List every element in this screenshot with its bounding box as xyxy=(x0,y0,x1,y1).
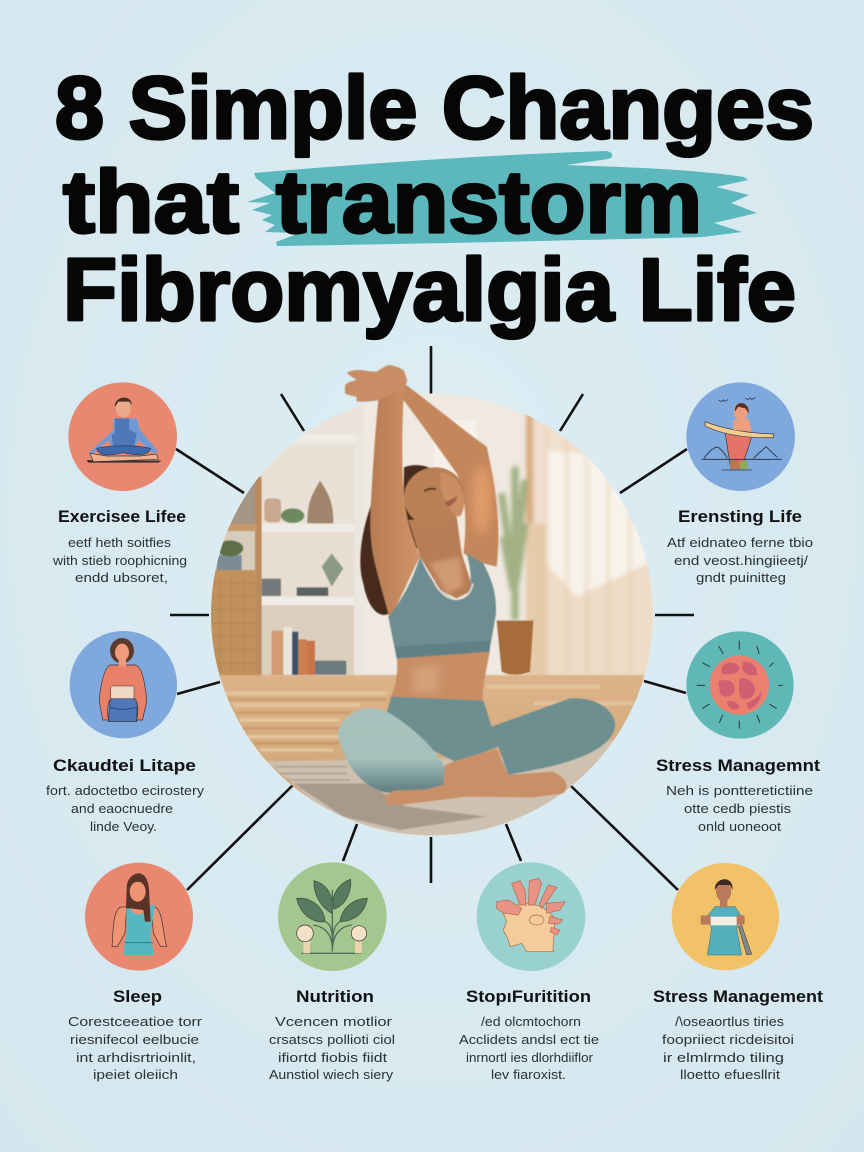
back arm xyxy=(403,383,498,567)
central photo: woman stretching in yoga pose xyxy=(200,365,670,850)
icon: person holding a sign xyxy=(672,863,779,970)
heading: Sleep xyxy=(113,987,162,1006)
heading: Exercisee Lifee xyxy=(58,507,186,526)
description: /\oseaortlus tiries xyxy=(675,1014,785,1029)
title: that xyxy=(63,152,239,251)
feet and shins xyxy=(385,749,567,805)
leggings waist and right leg xyxy=(387,697,615,775)
description xyxy=(459,1014,599,1082)
panel: Ckaudtei Litape xyxy=(46,631,205,834)
title: 8 Simple Changes xyxy=(55,58,814,157)
description: end veost.hingiieetj/ xyxy=(674,553,808,568)
icon: leaves and plant xyxy=(278,862,387,971)
description: ipeiet oleiich xyxy=(93,1067,178,1082)
left leg xyxy=(338,708,446,793)
photo room background xyxy=(211,394,653,836)
panel: Erensting Life xyxy=(667,382,813,585)
panel: Nutrition xyxy=(269,862,395,1082)
description: lloetto efuesllrit xyxy=(680,1067,780,1082)
description: endd ubsoret, xyxy=(75,570,168,585)
floor xyxy=(220,674,644,836)
sports top xyxy=(388,553,496,658)
icon: head with inflamed branches xyxy=(477,862,585,971)
description xyxy=(68,1014,203,1082)
description: Neh is pontteretictiine xyxy=(666,783,813,798)
connector lines xyxy=(170,346,694,890)
panel: StopiFuritition xyxy=(459,862,599,1082)
description: /ed olcmtochorn xyxy=(481,1014,581,1029)
midriff xyxy=(389,650,490,703)
heading: Stress Managemnt xyxy=(656,756,820,775)
heading: Nutrition xyxy=(296,987,374,1006)
description: and eaocnuedre xyxy=(71,801,173,816)
icon: balancing figure xyxy=(686,382,795,491)
woman figure xyxy=(338,365,615,805)
description xyxy=(666,783,813,834)
hair xyxy=(360,465,433,615)
description: lev fiaroxist. xyxy=(491,1067,566,1082)
title: Fibromyalgia Life xyxy=(63,240,796,339)
shelf objects xyxy=(307,481,333,523)
description: Vcencen motlior xyxy=(275,1014,393,1029)
description: Aunstiol wiech siery xyxy=(269,1067,394,1082)
description: otte cedb piestis xyxy=(684,801,792,816)
shelf unit xyxy=(260,433,360,680)
icon: person with abdominal band xyxy=(70,631,177,738)
description: eetf heth soitfies xyxy=(68,535,172,550)
panel: Exercisee Lifee xyxy=(52,382,187,585)
description: fort. adoctetbo ecirostery xyxy=(46,783,205,798)
description: int arhdisrtrioinlit, xyxy=(76,1050,196,1065)
description: Atf eidnateo ferne tbio xyxy=(667,535,813,550)
panel: Stress Managemnt xyxy=(656,631,820,834)
description xyxy=(269,1014,395,1082)
title xyxy=(55,58,814,339)
description xyxy=(46,783,205,834)
curtain xyxy=(496,414,653,692)
description: inrnortl ies dlorhdiiflor xyxy=(466,1050,594,1065)
description: ifiortd fiobis fiidt xyxy=(278,1050,387,1065)
icon: radiating inflammation xyxy=(686,631,794,739)
panel: Stress Management xyxy=(653,863,823,1082)
description: linde Veoy. xyxy=(90,819,157,834)
description: Acclidets andsl ect tie xyxy=(459,1032,599,1047)
rug xyxy=(267,740,614,836)
description: foopriiect ricdeisitoi xyxy=(662,1032,794,1047)
heading: Stress Management xyxy=(653,987,823,1006)
description: gndt puinitteg xyxy=(696,570,786,585)
description: riesnifecol eelbucie xyxy=(70,1032,199,1047)
description: onld uoneoot xyxy=(698,819,781,834)
heading: Erensting Life xyxy=(678,507,802,526)
description: ir elmlrmdo tiling xyxy=(663,1050,784,1065)
description xyxy=(662,1014,794,1082)
title: transtorm xyxy=(276,152,702,251)
plant pot xyxy=(497,621,533,675)
heading: Ckaudtei Litape xyxy=(53,756,196,775)
description: crsatscs pollioti ciol xyxy=(269,1032,395,1047)
heading: StopıFuritition xyxy=(466,987,591,1006)
description xyxy=(667,535,813,585)
description xyxy=(52,535,187,585)
description: with stieb roophicning xyxy=(52,553,187,568)
wooden case and basket xyxy=(200,477,255,524)
hands xyxy=(345,365,407,402)
panel: Sleep xyxy=(68,863,203,1082)
icon: seated meditation xyxy=(68,382,177,491)
front arm xyxy=(370,382,420,620)
teal brush highlight xyxy=(247,151,757,246)
neck xyxy=(408,517,473,598)
icon: woman with long hair xyxy=(85,863,193,971)
head xyxy=(396,459,473,534)
description: Corestceeatioe torr xyxy=(68,1014,203,1029)
